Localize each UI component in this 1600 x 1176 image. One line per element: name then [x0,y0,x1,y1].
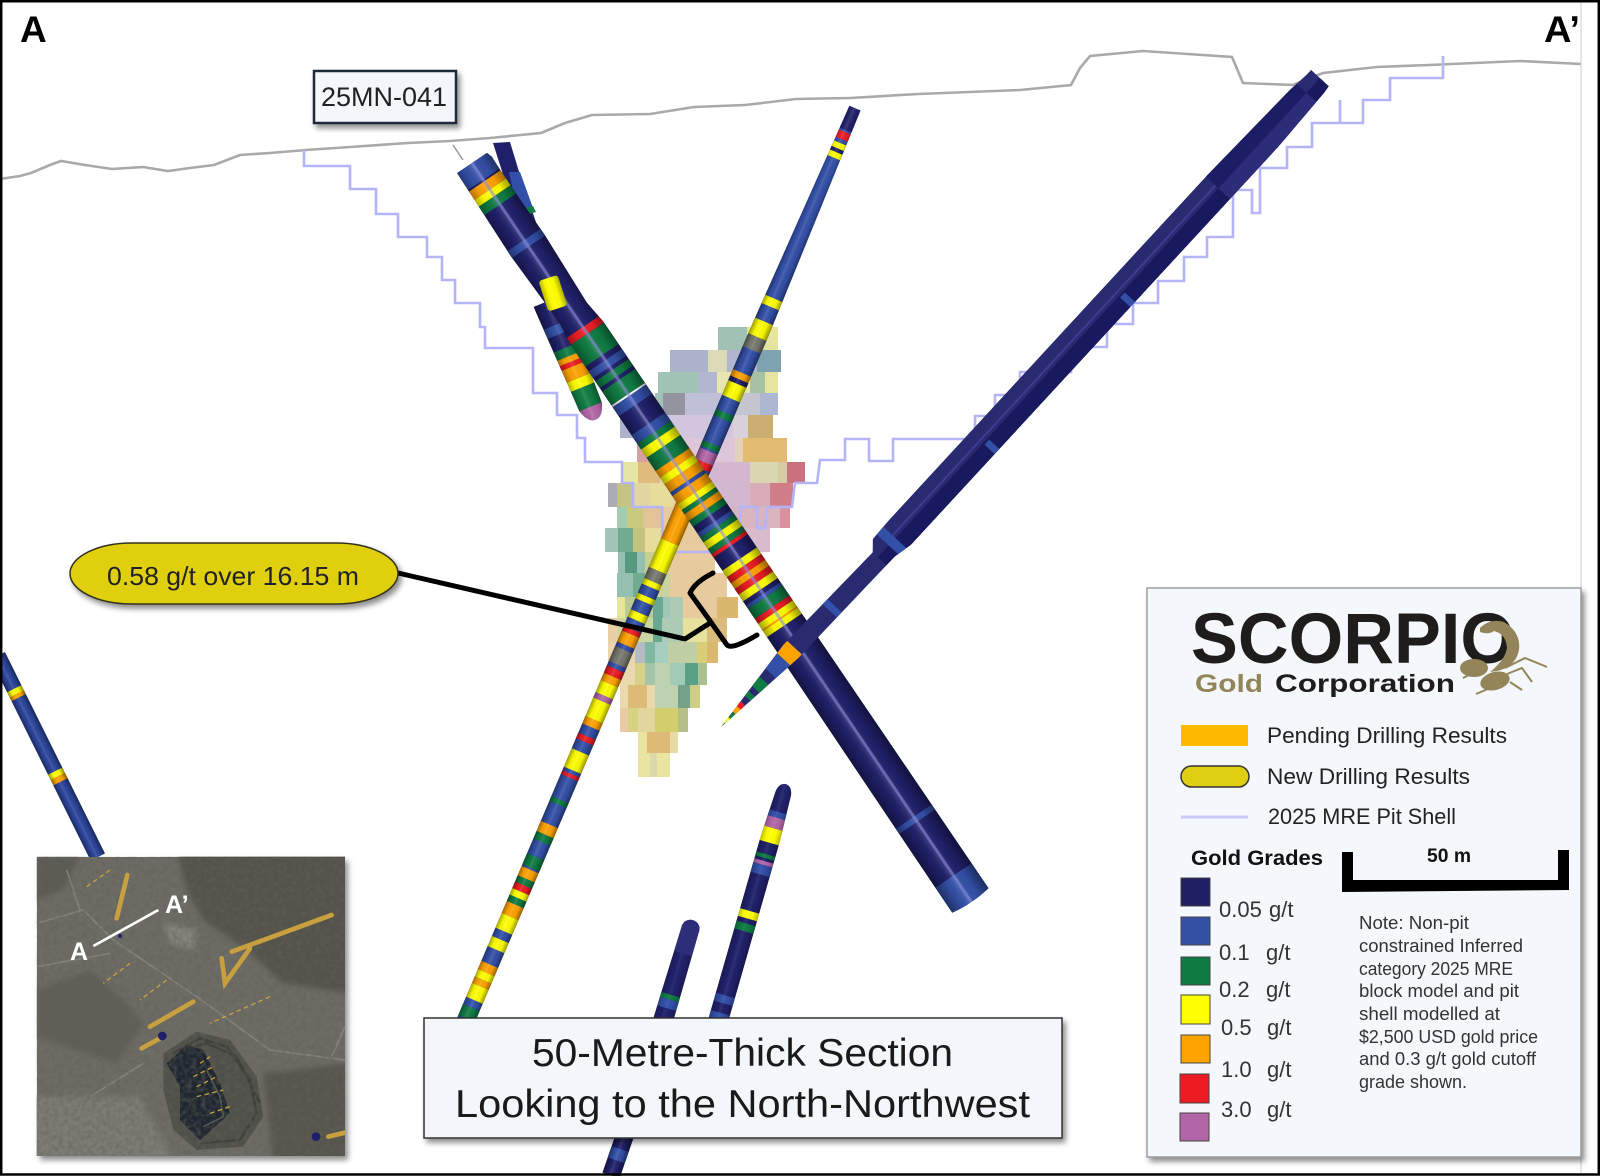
drill hole: lower centre right [708,784,792,1018]
callout: intercept [70,543,398,604]
legend: new: New Drilling Results [1267,764,1470,789]
title box: Looking to the North-Northwest [455,1083,1030,1126]
leader to 25MN-041 [453,145,463,160]
grade labels: 1.0 [1221,1057,1252,1082]
callout leader and brace [398,573,757,646]
grade labels: 3.0 [1221,1097,1252,1122]
drill hole: lower centre [654,920,700,1018]
grade labels: g/t [1267,1057,1291,1082]
legend: pit shell: 2025 MRE Pit Shell [1268,804,1456,829]
grade labels: 0.5 [1221,1015,1252,1040]
legend: new [1181,764,1470,789]
drill hole: long south-west dipping [450,104,864,1041]
right page edge line [1580,2,1582,1174]
legend: pending: Pending Drilling Results [1267,723,1507,748]
drill hole: upper stub [493,142,565,280]
location inset map: A’ [165,891,189,919]
hole label: 25MN-041 [321,82,447,112]
block model [605,327,805,777]
drill hole: bottom stub [603,1129,635,1176]
grade labels: 0.05 [1219,897,1262,922]
drill hole: left [0,652,106,862]
scale bar [1342,846,1569,892]
grade swatches [1180,878,1210,1141]
note: grade shown. [1359,1072,1467,1092]
note: category 2025 MRE [1359,959,1513,979]
hole label [314,71,456,123]
pit shell [304,56,1443,552]
note: constrained Inferred [1359,936,1523,956]
gold grades heading: Gold Grades [1191,847,1323,870]
title box: 50-Metre-Thick Section [532,1032,953,1075]
note [1359,913,1538,1092]
logo: Corporation [1275,670,1455,698]
section limit label A prime: A’ [1544,9,1580,50]
grade labels: 0.2 [1219,977,1250,1002]
grade labels: 0.1 [1219,940,1250,965]
location inset map [30,850,350,1160]
logo: Gold [1195,670,1263,698]
yellow intercept on branch [538,275,567,312]
topography line [0,51,1581,179]
grade labels: g/t [1269,897,1293,922]
note: and 0.3 g/t gold cutoff [1359,1049,1537,1069]
drill hole: main 25MN-041 [454,151,991,917]
note: block model and pit [1359,981,1519,1001]
title box [424,1018,1062,1138]
logo: SCORPIO [1191,600,1515,679]
grade labels [1219,897,1293,1122]
grade labels: g/t [1266,977,1290,1002]
section limit label A: A [20,9,47,50]
drill hole: short branch with pink end [534,302,602,420]
grade labels: g/t [1267,1097,1291,1122]
note: shell modelled at [1359,1004,1500,1024]
grade labels: g/t [1267,1015,1291,1040]
scale bar: 50 m [1427,846,1471,867]
drill hole: long north-east dipping [703,66,1333,744]
grade labels: g/t [1266,940,1290,965]
callout: intercept: 0.58 g/t over 16.15 m [107,561,359,591]
location inset map: A [70,938,88,966]
legend panel [1147,588,1581,1157]
note: $2,500 USD gold price [1359,1027,1538,1047]
note: Note: Non-pit [1359,913,1469,933]
